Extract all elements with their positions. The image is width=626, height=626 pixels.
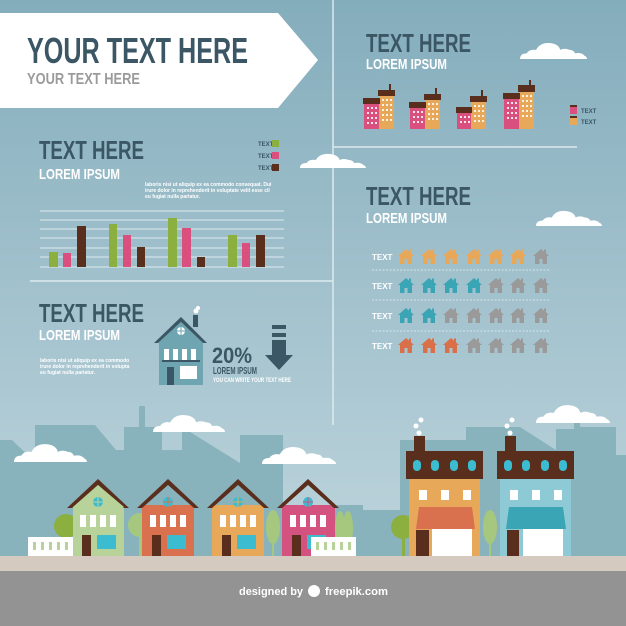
icon: down arrow	[265, 325, 293, 370]
legend	[258, 140, 279, 172]
legend: TEXT	[258, 154, 274, 160]
bar chart	[40, 211, 284, 267]
subheading: LOREM IPSUM	[366, 210, 447, 227]
footer credit: designed by	[239, 586, 304, 598]
legend: TEXT	[581, 109, 597, 115]
panel: house rating rows	[366, 181, 549, 353]
row 1	[372, 249, 549, 264]
shop: blue	[497, 418, 574, 556]
heading: TEXT HERE	[366, 28, 471, 58]
heading: TEXT HERE	[39, 298, 144, 328]
stat: 20%: 20%	[212, 343, 252, 368]
stat: 20%: YOU CAN WRITE YOUR TEXT HERE	[213, 377, 291, 384]
row 3: TEXT	[372, 312, 393, 321]
row 3	[372, 308, 549, 323]
subtitle: YOUR TEXT HERE	[27, 71, 140, 88]
clouds: city	[14, 405, 610, 464]
dividers	[30, 0, 577, 425]
heading: TEXT HERE	[39, 135, 144, 165]
stat: 20%	[212, 343, 291, 384]
house: green	[67, 479, 129, 556]
shop: orange	[406, 418, 483, 556]
clouds: sky	[300, 43, 602, 226]
paragraph: laboris nisi ut aliquip ex ea commodo consequat. Dui	[145, 182, 272, 188]
icon: house	[154, 306, 207, 385]
city skyline	[0, 406, 626, 556]
header banner	[0, 13, 318, 108]
footer credit	[239, 585, 388, 598]
paragraph: eu fugiat nulla pariatur.	[145, 194, 201, 200]
stat: 20%: LOREM IPSUM	[213, 366, 257, 377]
row 4: TEXT	[372, 342, 393, 351]
trees	[54, 510, 497, 556]
paragraph: laboris nisi ut aliquip ex ea commodo	[40, 358, 129, 364]
subheading: LOREM IPSUM	[366, 56, 447, 73]
houses row	[67, 479, 339, 556]
legend	[570, 105, 597, 126]
row 2	[372, 278, 549, 293]
paragraph	[145, 182, 272, 200]
paragraph	[40, 358, 130, 376]
panel: buildings section	[363, 28, 597, 129]
legend: TEXT	[581, 120, 597, 126]
ground	[0, 556, 626, 626]
heading: TEXT HERE	[366, 181, 471, 211]
legend: TEXT	[258, 142, 274, 148]
subheading: LOREM IPSUM	[39, 166, 120, 183]
building chart	[363, 80, 535, 129]
paragraph: irure dolor in reprehenderit in voluptate velit esse cil	[145, 188, 270, 194]
legend: TEXT	[258, 166, 274, 172]
paragraph: irure dolor in reprehenderit in volupta	[40, 364, 130, 370]
paragraph: eu fugiat nulla pariatur.	[40, 370, 96, 376]
house: pink	[277, 479, 339, 556]
panel: bar chart section	[39, 135, 284, 267]
house: red	[137, 479, 199, 556]
row 1: TEXT	[372, 253, 393, 262]
row 4	[372, 338, 549, 353]
row 2: TEXT	[372, 282, 393, 291]
footer credit: freepik.com	[325, 586, 388, 598]
panel: 20% section	[39, 298, 293, 385]
house: orange	[207, 479, 269, 556]
subheading: LOREM IPSUM	[39, 327, 120, 344]
fences	[28, 537, 356, 556]
title: YOUR TEXT HERE	[27, 30, 248, 71]
